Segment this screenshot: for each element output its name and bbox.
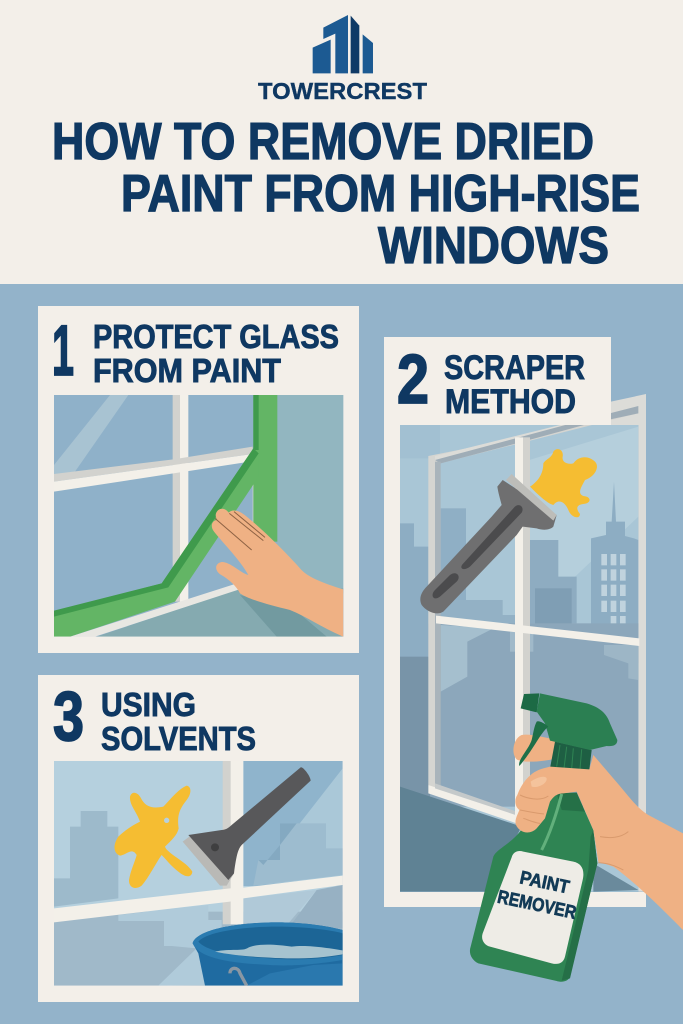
window sash (428, 406, 639, 823)
step 3 heading: USING (101, 686, 196, 723)
panel: step 2 scraper method (384, 337, 683, 982)
illustration: high-rise window with scraper (384, 337, 683, 982)
scraper tool (420, 474, 557, 613)
bottle body (470, 793, 597, 982)
step 1 heading (93, 318, 339, 389)
header band (0, 0, 683, 284)
illustration: taping window (54, 395, 343, 637)
step 2 heading: METHOD (445, 383, 576, 421)
step 2 heading: SCRAPER (444, 349, 585, 387)
step 2 number: 2 (397, 340, 429, 418)
step 1 number: 1 (52, 312, 74, 391)
step 3 heading (101, 686, 256, 757)
back finger (513, 735, 558, 762)
step 1 heading: PROTECT GLASS (93, 318, 339, 355)
spray head (519, 693, 617, 770)
title: WINDOWS (378, 217, 609, 275)
background (0, 284, 683, 1024)
illustration: window with paint and bucket (54, 761, 343, 986)
step 2 heading card (384, 337, 611, 425)
brand name: TOWERCREST (258, 78, 428, 104)
hand (212, 509, 343, 637)
panel: step 3 using solvents (38, 675, 359, 1002)
step 1 heading: FROM PAINT (93, 352, 281, 389)
step 3 number: 3 (53, 677, 84, 755)
scraper (183, 767, 311, 886)
label (482, 851, 583, 964)
gripping hand and arm (515, 755, 683, 930)
label: REMOVER (496, 886, 579, 923)
panel: step 1 protect glass (38, 306, 359, 653)
masking tape (54, 395, 277, 637)
logo: Towercrest tower icon (313, 15, 373, 73)
title (52, 113, 640, 275)
spray bottle and hand (470, 693, 683, 982)
step 2 heading (444, 349, 585, 421)
label: PAINT (518, 867, 572, 898)
title: HOW TO REMOVE DRIED (52, 113, 594, 171)
paint splatter (114, 786, 192, 888)
bucket (193, 922, 343, 986)
paint splatter (530, 449, 597, 517)
step 3 heading: SOLVENTS (101, 720, 256, 757)
